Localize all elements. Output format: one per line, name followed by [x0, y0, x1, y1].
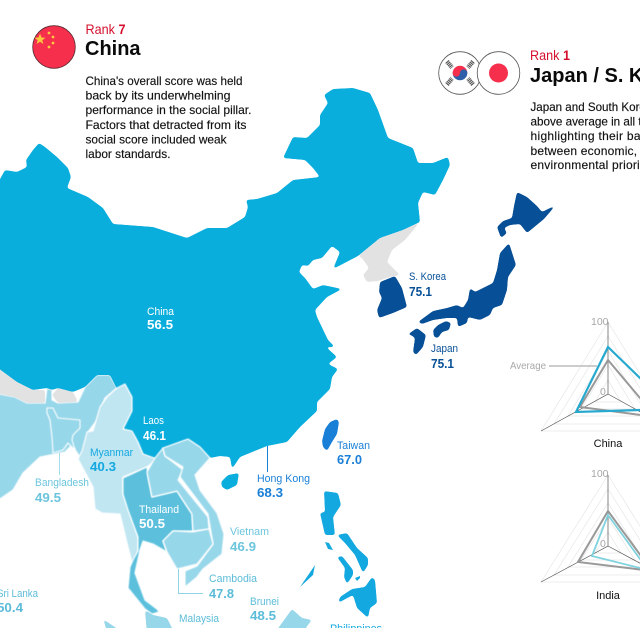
label: Taiwan: [337, 440, 370, 467]
country: Laos: [147, 448, 209, 531]
text block: performance in the social pillar.: [86, 103, 252, 117]
label: Cambodia: 47.8: [209, 586, 234, 601]
icon: China flag: [33, 26, 75, 68]
map of Asia: [0, 88, 556, 628]
text block: China's overall score was held: [86, 74, 242, 88]
label: Brunei: [250, 596, 279, 623]
panel: China: [33, 21, 252, 161]
text block: [530, 101, 640, 172]
axis label 0: 0: [600, 538, 606, 550]
country: Bangladesh: [47, 408, 80, 453]
label: S. Korea: S. Korea: [409, 271, 447, 283]
label: Bangladesh: 49.5: [35, 490, 61, 505]
axis label 100: 100: [591, 468, 609, 480]
label: Brunei: 48.5: [250, 608, 276, 623]
label: Hong Kong: Hong Kong: [257, 473, 310, 485]
India score triangle: [592, 515, 640, 570]
country: Nepal: [0, 365, 45, 403]
label: China: [147, 306, 175, 332]
country: Malaysia: [145, 609, 312, 628]
label: Vietnam: [230, 526, 269, 554]
country: Taiwan: [322, 419, 339, 451]
label: Bangladesh: Bangladesh: [35, 477, 89, 489]
country: North Korea: [358, 222, 420, 282]
label: Japan: [431, 343, 458, 371]
China score triangle: [576, 347, 640, 412]
average callout: [510, 360, 597, 372]
radar chart: China: [510, 316, 640, 450]
country labels: [0, 271, 458, 628]
text block: back by its underwhelming: [86, 88, 230, 102]
label: Hong Kong: 68.3: [257, 485, 283, 500]
label: Hong Kong: [257, 473, 310, 500]
chart name: India: [596, 590, 621, 602]
text block: social score included weak: [86, 132, 227, 146]
heading: China: [85, 38, 141, 60]
label: Myanmar: 40.3: [90, 459, 116, 474]
average triangle: [578, 511, 640, 571]
label: Sri Lanka: [0, 588, 39, 615]
radar chart: India: [541, 468, 640, 602]
icon: Japan flag: [477, 52, 520, 94]
label: Brunei: Brunei: [250, 596, 279, 608]
country: Sumatra: [103, 619, 125, 628]
label: Thailand: 50.5: [139, 516, 165, 531]
country: Japan: [407, 192, 556, 355]
country: Hainan: [221, 473, 239, 490]
country: Philippines: [300, 491, 377, 618]
label: Cambodia: Cambodia: [209, 573, 258, 585]
leader lines: [60, 446, 268, 594]
text block: [86, 74, 252, 161]
label: Laos: 46.1: [143, 428, 166, 443]
axis label 0: 0: [600, 386, 606, 398]
label: Laos: [143, 415, 166, 443]
label: Cambodia: [209, 573, 258, 601]
label: Taiwan: Taiwan: [337, 440, 370, 452]
rank: Rank 1: [530, 47, 570, 63]
label: Thailand: [139, 504, 179, 531]
label: Laos: Laos: [143, 415, 164, 427]
axis label 100: 100: [591, 316, 609, 328]
country: South Korea: [377, 276, 407, 318]
label: Bangladesh: [35, 477, 89, 505]
label: China: 56.5: [147, 317, 173, 332]
country: Vietnam: [163, 439, 224, 587]
country: Myanmar: [78, 384, 157, 566]
country: China: [0, 88, 450, 469]
label: Malaysia: Malaysia: [179, 613, 220, 625]
country: India: [0, 375, 117, 503]
icon: South Korea flag: [439, 52, 481, 94]
rank: Rank 7: [86, 21, 126, 37]
text block: Factors that detracted from its: [86, 118, 246, 132]
country: Cambodia: [163, 529, 213, 569]
label: China: China: [147, 306, 175, 318]
country: Bhutan: [52, 388, 78, 403]
label: Japan: 75.1: [431, 356, 454, 371]
label: Vietnam: 46.9: [230, 539, 256, 554]
text block: labor standards.: [86, 147, 170, 161]
chart name: China: [594, 438, 623, 450]
label: Myanmar: [90, 447, 133, 474]
panel: Japan / S. Korea: [439, 47, 640, 172]
label: Taiwan: 67.0: [337, 452, 362, 467]
label: Japan: Japan: [431, 343, 458, 355]
label: Thailand: Thailand: [139, 504, 179, 516]
label: S. Korea: [409, 271, 447, 299]
average triangle: [580, 360, 640, 417]
country: Thailand: [123, 467, 193, 614]
label: Myanmar: Myanmar: [90, 447, 133, 459]
average callout: Average: [510, 360, 546, 372]
label: S. Korea: 75.1: [409, 284, 432, 299]
label: Vietnam: Vietnam: [230, 526, 269, 538]
